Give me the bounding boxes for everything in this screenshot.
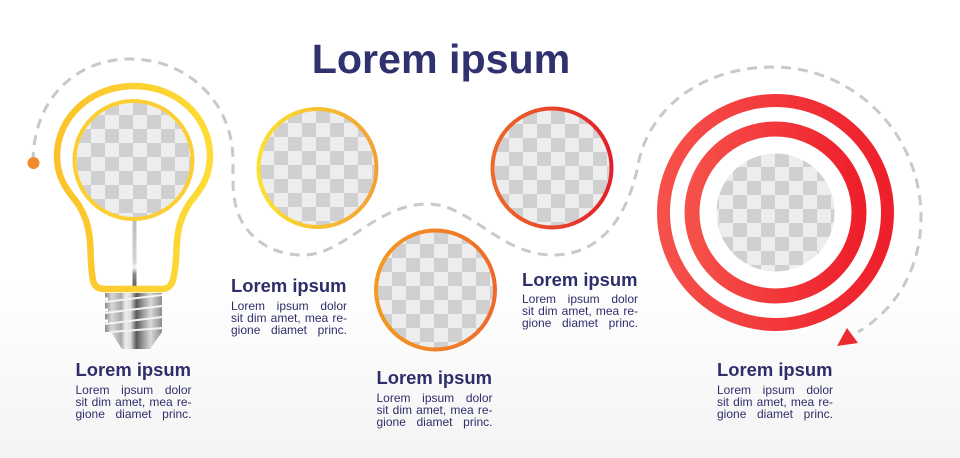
target inner ring xyxy=(692,129,859,296)
text block 2: Lorem ipsum xyxy=(231,275,346,296)
bulb outline xyxy=(57,86,210,289)
text block 1 xyxy=(76,359,192,421)
image placeholder 4 xyxy=(492,108,612,228)
target outer ring xyxy=(664,100,888,324)
text block 2: sit dim amet, mea re- xyxy=(231,311,347,325)
text block 2 xyxy=(231,275,347,337)
bulb filament xyxy=(132,221,136,289)
dashed route xyxy=(33,59,921,332)
text block 5: Lorem ipsum xyxy=(717,359,832,380)
icon: light bulb xyxy=(57,86,210,349)
text block 1: sit dim amet, mea re- xyxy=(76,395,192,409)
text block 4 xyxy=(522,269,638,330)
text block 5: Lorem ipsum dolor xyxy=(717,383,833,397)
text block 4: sit dim amet, mea re- xyxy=(522,304,638,318)
text block 4: gione diamet princ. xyxy=(522,316,638,330)
text block 1: Lorem ipsum dolor xyxy=(76,383,192,397)
text block 5: gione diamet princ. xyxy=(717,407,833,421)
text block 2: gione diamet princ. xyxy=(231,323,347,337)
text block 2: Lorem ipsum dolor xyxy=(231,299,347,313)
text block 3: gione diamet princ. xyxy=(376,415,492,429)
text block 3: sit dim amet, mea re- xyxy=(376,403,492,417)
text block 5 xyxy=(717,359,833,421)
arrow head xyxy=(837,328,858,346)
bulb image placeholder xyxy=(74,101,192,219)
text block 3: Lorem ipsum dolor xyxy=(376,391,492,405)
text block 5: sit dim amet, mea re- xyxy=(717,395,833,409)
image placeholder 2 xyxy=(258,109,376,227)
target image placeholder xyxy=(716,154,834,272)
icon: target xyxy=(664,100,888,324)
text block 3: Lorem ipsum xyxy=(376,367,492,388)
text block 1: Lorem ipsum xyxy=(76,359,191,380)
bulb screw base xyxy=(105,293,162,349)
text block 4: Lorem ipsum xyxy=(522,269,637,290)
route start dot xyxy=(28,157,40,169)
text block 1: gione diamet princ. xyxy=(76,407,192,421)
text block 4: Lorem ipsum dolor xyxy=(522,292,638,306)
image placeholder 3 xyxy=(376,230,495,350)
title: Lorem ipsum xyxy=(312,36,570,82)
text block 3 xyxy=(376,367,492,429)
